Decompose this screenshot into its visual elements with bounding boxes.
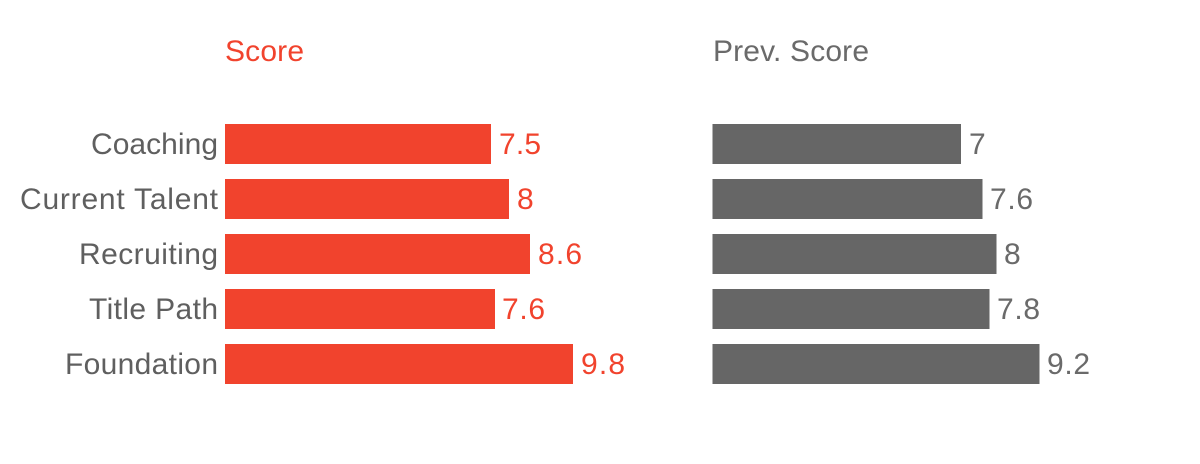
bar: Title Path score	[225, 289, 495, 329]
bar: Recruiting previous score	[712, 234, 996, 274]
bar: Current Talent previous score	[712, 179, 982, 219]
bar: Coaching score	[225, 124, 491, 164]
value: 9.2: 9.2	[1047, 348, 1090, 381]
bar: Foundation previous score	[712, 344, 1040, 384]
value: 7.6: 7.6	[990, 183, 1033, 216]
bar: Title Path previous score	[712, 289, 990, 329]
label: Foundation: Foundation	[65, 348, 218, 381]
value: 8: 8	[517, 183, 534, 216]
value: 7.6: 7.6	[502, 293, 545, 326]
value: 7: 7	[969, 128, 986, 161]
heading: Score: Score	[225, 35, 304, 68]
label: Current Talent: Current Talent	[20, 183, 219, 216]
value: 8: 8	[1004, 238, 1021, 271]
value: 9.8: 9.8	[581, 348, 625, 381]
bar chart: Score	[225, 124, 625, 384]
label: Recruiting: Recruiting	[79, 238, 218, 271]
value: 7.5: 7.5	[499, 128, 541, 161]
value: 7.8: 7.8	[997, 293, 1040, 326]
bar: Recruiting score	[225, 234, 530, 274]
label: Title Path: Title Path	[89, 293, 218, 326]
bar: Foundation score	[225, 344, 573, 384]
bar: Current Talent score	[225, 179, 509, 219]
value: 8.6: 8.6	[538, 238, 582, 271]
bar chart: Prev. Score	[712, 124, 1090, 384]
bar: Coaching previous score	[712, 124, 961, 164]
label: Coaching: Coaching	[91, 128, 218, 161]
category labels	[20, 128, 219, 381]
heading: Prev. Score: Prev. Score	[713, 35, 869, 68]
